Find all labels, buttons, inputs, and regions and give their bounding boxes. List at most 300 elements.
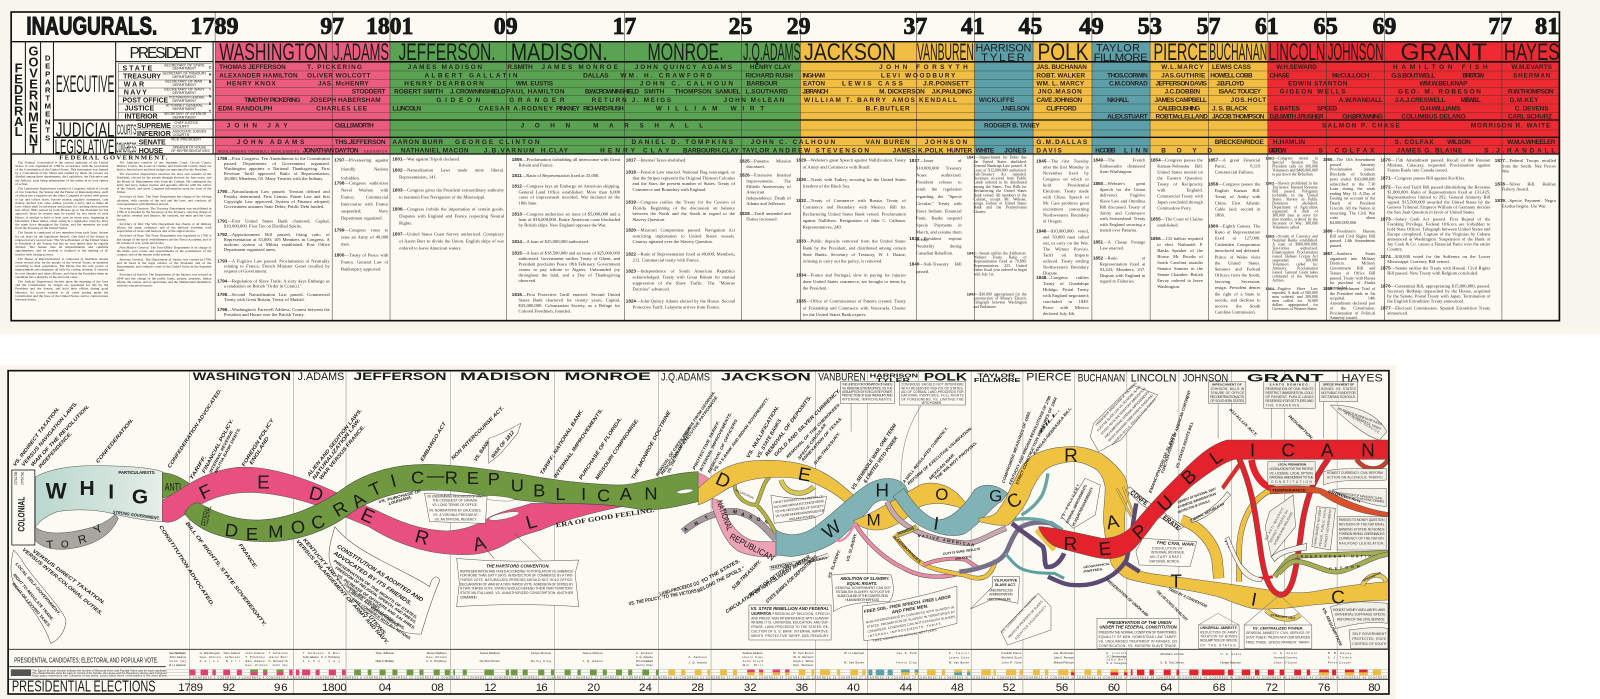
minor parties 1840s-1850s: NATIVE AMERICAN [917,533,975,548]
cabinet, court and congress names: S. COLFAX [1395,139,1434,146]
left labels: federal government structure: DEPARTMENT [173,75,196,79]
candidates per election: Geo. Clinton · Jefferson [200,655,241,659]
president names row: J.Q.ADAMS [743,39,801,66]
candidates per election: Jas. Buchanan [1054,651,1074,655]
chronology columns by presidency: 1875—Senate ratifies the Treaty with Hawaii. Civil Rights Bill passed. New Treaty with Belgium concluded. [1380,266,1490,276]
cabinet, court and congress names: ALEX.STUART [1107,113,1148,120]
cabinet, court and congress names: JAMES CAMPBELL [1155,97,1207,104]
chronology columns by presidency: 1813—Congress authorizes an issue of $5,000,000 and a loan of $16,000,000. Entire American coast blockaded by British ships. New England opposes the War. [512,211,620,227]
candidates per election: Geo. Washington [169,651,186,655]
bands: independent national and reform: REFORM [1329,564,1360,571]
left labels: federal government structure: DEPARTMENT [173,83,196,87]
issue labels above ribbons: KANSAS-NEBRASKA BILL. [1032,405,1073,456]
cabinet, court and congress names: LEWIS CASS [1212,64,1251,71]
president names row: J.ADAMS [333,39,389,66]
cabinet, court and congress names: HUNTER [947,147,973,154]
candidates per election: Hugh L. White [793,659,814,663]
president names row [219,39,1559,66]
notes: Republican era boxes: SPECIE PAYMENTS. TARIFF [1344,411,1382,431]
note: vs. undermining box: THE CONQUEST OF CANADA. [432,499,478,503]
notes: Whig, abolition, free soil and state rebellion boxes: INTERNAL IMPROVEMENTS. TARIFF. [868,622,942,638]
cabinet, court and congress names: ALBERT GALLATIN [425,72,518,79]
ribbon: Democratic-Republican: — [427,466,445,486]
small parties: Anti-Mason, National Republican, Nullification, Bolters [683,477,814,563]
scroll: constitution as adopted: PRESERVATION OF THE RIGHTS OF STATES. [333,558,419,620]
congress numbers row: 1 CONGRESS 2 CONGRESS 3 CONGRESS 4 CONGRESS 5 CONGRESS 6 CONGRESS 7 CONGRESS 8 CONGRESS 9 CONGRESS 10 CONGRESS 11 CONGRESS 12 CONGRESS 13 CONGRESS 14 CONGRESS 15 CONGRESS 16 CONGRESS 17 CONGRESS 18 CONGRESS 19 CONGRESS 20 CONGRESS 21 CONGRESS 22 CONGRESS 23 CONGRESS 24 CONGRESS 25 CONGRESS 26 CONGRESS 27 CONGRESS 28 CONGRESS 29 CONGRESS 30 CONGRESS 31 CONGRESS 32 CONGRESS 33 CONGRESS 34 CONGRESS 35 CONGRESS 36 CONGRESS 37 CONGRESS 38 CONGRESS 39 CONGRESS 40 CONGRESS 41 CONGRESS 42 CONGRESS 43 CONGRESS 44 CONGRESS 45 CONGRESS 46 CONGRESS [189,677,1387,679]
left labels: federal government structure: DEPARTMENT [173,67,196,71]
panel: inaugurals table [11,12,1559,321]
cabinet, court and congress names: COLUMBUS DELANO [1401,113,1466,120]
notes: Whig, abolition, free soil and state rebellion boxes: ASSUMPTION OF EXECUTIVE POWER. [842,390,893,394]
notes: Republican era boxes: VS. SQUATTER SOVEREIGNTY. [1071,486,1094,527]
notes: Republican era boxes: REVISION OF BUSINESS METHODS [1337,407,1383,426]
president names header: POLK [924,372,968,384]
ribbon: Federal: A [470,532,489,555]
chronology columns by presidency: 1832—Treaty of Commerce with Russia. Treaty of Commerce and Boundary with Mexico. Bill for Rechartering United States Bank vetoed. Proclamation against Nullifiers. Resignation of John C. Calhoun. Representatives, 240. [796,198,906,230]
cabinet, court and congress names: J. CROWNINSHIELD [450,89,506,96]
left labels: federal government structure: COURTS [173,133,190,137]
left labels: federal government structure: POSTMASTER GENERAL [169,96,205,100]
left labels: federal government structure: DEPARTMENT [173,107,196,111]
candidates per election: R. H. Harrison [169,663,186,667]
band: temperance and prohibition [1270,486,1389,517]
issue labels above ribbons: MISSOURI COMPROMISE. [594,418,641,481]
candidates per election: John Jay [169,659,187,663]
election years: 76 [1318,682,1330,694]
issue labels below ribbons [21,389,1344,647]
ribbon: Federal: E [257,471,270,492]
cabinet, court and congress names: JOHN MARSHALL [521,122,703,129]
ribbon: Democratic-Republican: D [224,520,239,541]
notes: Republican era boxes: LEGAL PROHIBITION. [1278,462,1307,466]
scroll: local self-government: LOCAL SELF-GOVERNMENT. [14,561,62,616]
box: colonial: COLONIAL [16,496,26,532]
notes: Whig, abolition, free soil and state rebellion boxes: VS.FUGITIVE [994,579,1018,583]
chronology columns by presidency: 1803—Congress gives the President extraordinary authority to maintain Free Navigation of the Mississippi. [392,187,504,199]
band: Confederate: ERATE [1161,514,1182,532]
notes: Republican era boxes: RESERVED FOR SETTLERS AND [1265,399,1314,403]
year scale: 09 [494,13,518,40]
issue labels above ribbons: SUB-TREASURY. [812,431,841,466]
issue labels above ribbons: VERSUS NAVIGATION LAWS. [21,401,79,468]
issue labels above ribbons: ANNEXATION OF TEXAS. [799,416,843,463]
year scale: 61 [1255,13,1279,40]
president names row: BUCHANAN [1209,39,1267,66]
ribbon: Whig second section [776,479,913,557]
notes: Whig, abolition, free soil and state rebellion boxes: CONGRESS SHOULD NOT INTERFERE [901,383,964,387]
federal government description: Secretary of Interior. The Department of the Interior was created in 1849 and has charge of the public lands, patents, pensions, Indian affairs, the census, and of agriculture and the Smithsonian Institution, with the education bureau. [117,273,211,288]
cabinet, court and congress names: WM.W.BELKNAP [1419,81,1468,88]
cabinet, court and congress names: ROBT.McLELLAND [1156,113,1208,120]
cabinet, court and congress names: W.M.A.WHEELER [1507,139,1556,146]
note: tilted Democratic protest box: ASSUMED POWERS. [789,514,816,521]
cabinet, court and congress names: JEFFERSON DAVIS [1156,81,1207,88]
ribbon: Whig (colonial): PARTICULARISTS. [118,470,156,475]
notes: Republican era boxes: CIVIL SERVICE [1352,416,1380,434]
year scale: 49 [1079,13,1104,40]
issue labels above ribbons: REMOVAL OF THE CHEROKEES [785,402,841,459]
notes: Republican era boxes: HONEST GOVERNMENT [1323,509,1332,547]
cabinet, court and congress names: EDM. RANDOLPH [218,105,273,112]
notes: Whig, abolition, free soil and state rebellion boxes: VS. CORRUPTION, FEDERAL [1000,594,1037,634]
bars: party control by congress [189,670,1381,675]
cabinet, court and congress names: L.SOUTHARD [746,89,788,96]
left labels: federal government structure: JUDICIAL [56,119,114,142]
ribbon: Democratic-Republican: R [329,497,351,521]
notes: Republican era boxes: DEMENT OF NATIONAL DEBT [1177,487,1217,504]
candidates per election: Henry Clay [636,663,653,667]
ribbon: Democratic first section: E [797,463,813,486]
year scale: 45 [1019,13,1042,40]
cabinet, court and congress names: ALEXANDER HAMILTON [219,72,298,79]
federal government description: Secretary of Navy. The Navy Department was organized in 1798. It has charge of the naval establishment and the Naval Academy, and of all vessels of war, yards and docks. [117,234,211,245]
chronology columns by presidency [217,155,1556,320]
president names header: MONROE [565,371,651,383]
chronology columns by presidency: 1826—Extensive Internal Improvements. The Fiftieth Anniversary of American Independence. Death of Adams and Jefferson. [739,173,791,206]
callout: the Hartford Convention: STATE MILITIA LAWS. VS. UNAUTHORIZED CONSCRIPTION. ANOTHER [460,591,574,595]
left labels: federal government structure: TREASURY [123,74,161,81]
cabinet, court and congress names: S. COLFAX [1319,147,1375,154]
candidates per election: Horatio Seymour [1220,660,1241,664]
year scale: 41 [961,13,985,40]
left labels: federal government structure: PRESIDENT [130,45,203,62]
cabinet, court and congress names: B.F.BUTLER [866,105,910,112]
legend explanation: Each space represents one Congress of two years; colors follow those of the parties in the chart above. [32,674,168,678]
issue labels below ribbons: TO THE STATES. [700,558,741,585]
ribbon: Democratic-Republican: A [348,488,370,512]
cabinet, court and congress names: JOHN JAY [227,122,288,129]
issue labels above ribbons: MILITIA BANK DEBTS. [213,427,242,474]
notes: Republican era boxes: PEACE. PUBLIC FAITH [1318,507,1328,547]
cabinet, court and congress names: DANIEL D. TOMPKINS [632,139,733,146]
issue labels above ribbons: THE WILMOT PROVISO. [933,440,978,481]
notes: Whig, abolition, free soil and state rebellion boxes: WITH RESERVED RIGHTS OF STATES. [901,386,964,390]
president names header: JEFFERSON [353,371,447,383]
issue labels below ribbons: FRANCE. [237,543,258,570]
president names header: BUCHANAN [1078,372,1125,384]
election years: 12 [484,682,497,694]
chronology columns by presidency: 1877—Electoral Commission. Spanish Extradition Treaty announced. [1380,306,1490,316]
scroll: constitution as adopted: FREEDOM OF RELIGION, SPEECH, AND PRESS. [334,565,418,625]
notes: Republican era boxes: CONSTITUTION [1271,480,1312,484]
chronology columns by presidency: 1877—Federal Troops recalled from the South. Nez Perces War. [1495,158,1556,174]
election years: 56 [1056,682,1068,694]
notes: Whig, abolition, free soil and state rebellion boxes: VS. STATE REBELLION AND FEDERAL [751,606,829,611]
election years: 96 [274,682,288,694]
notes: Republican era boxes: PRESERVATION OF THE UNION [1107,620,1172,625]
cabinet, court and congress names: JAS. McHENRY [318,81,369,88]
issue labels below ribbons: LAND-PROCEEDS GO [659,581,700,598]
year scale: 69 [1373,13,1396,40]
election years: 92 [223,682,235,694]
federal government description [15,154,211,319]
ribbon: Whig final section: I [932,513,940,534]
issue labels above ribbons: INTERNAL IMPROVEMENTS. [553,408,605,479]
chronology columns by presidency: 1873—Salary Grab Act passed. First Repeal of the Franking Privilege. Federal Officers are forbidden to hold State Offices. Telegraph between United States and Europe completed. Capture of the Virginius by Cubans announced at Washington. Suspension of the Bank of Jay Cook & Co. causes a Financial Panic over the entire Country. [1380,216,1490,251]
issue labels above ribbons: INDEPENDENCE. [38,431,74,470]
cabinet, court and congress names: WILLIAM T. BARRY [804,97,887,104]
left labels: federal government structure: DEPARTMENTS [44,54,51,143]
left labels: federal government structure: STATE [122,66,153,73]
minor parties 1840s-1850s: HUNKERS [897,526,915,536]
notes: Republican era boxes: FOREIGN PAYING. GREENBACKS [1339,532,1385,536]
notes: Republican era boxes: RECONSTRUCTION ACTS [1210,395,1244,399]
chronology columns by presidency: 1792—Apportionment Bill passed, fixing ratio of Representation at 33,000; 105 Members in Congress. A uniform system of Militia established. Post Office Department organized anew. [217,232,330,252]
cabinet, court and congress names: H.HAMLIN [1273,139,1305,146]
federal government description: Attorney General. The Department of Justice was created in 1789, and its head is the legal adviser of the President and of the Departments, and conducts cases of the United States in the Supreme Court. [117,258,211,272]
cabinet, court and congress names: SPEED [1317,105,1338,112]
cabinet, court and congress names: M.JEWELL [1461,97,1481,104]
left labels: federal government structure: INTERIOR [124,114,158,121]
president names row: TAYLOR [1096,43,1140,55]
issue labels above ribbons: WAR OF THE REVOLUTION. [30,404,91,468]
cabinet, court and congress names: HENRY DEARBORN [404,81,484,88]
cabinet, court and congress names: DALLAS [583,72,609,79]
ribbon: Democratic-Republican: C [411,467,424,487]
candidates per election: Thos. Jefferson [375,651,394,655]
cabinet, court and congress names: RODGER B. TANEY [984,122,1041,129]
notes: Republican era boxes: PROHIBITION OF MANUFACTURE [1335,491,1383,501]
federal government description: Post-Master General. The Post-Office Department is in charge of the mails, post routes and appointments of the postmasters of the country, and of the money order system. [117,246,211,257]
election years: 36 [796,682,808,694]
cabinet, court and congress names: T. PICKERING [307,64,362,71]
cabinet, court and congress names: CLIFFORD [1046,105,1077,112]
ribbon: Federal: F [196,480,215,503]
issue labels above ribbons: GOLD AND SILVER CURRENCY. [773,388,842,458]
ribbon: Democratic-Republican: FEDERAL [198,505,213,527]
president names row: WASHINGTON [219,39,328,66]
ribbon: Republican: U [1153,491,1177,515]
chronology columns by presidency: 1871—Congress passes Bill against Ku-Klux. [1380,176,1466,181]
ribbon: Republican [1038,440,1389,595]
cabinet, court and congress names: TIMOTHY PICKERING [244,97,300,104]
ribbon: Democratic-Republican [184,464,698,544]
chronology columns by presidency: 1879—Specie Payment. Negro Exodus begins. Ute War. [1495,198,1556,208]
issue labels above ribbons: VS. PURCHASE OF [378,488,422,504]
chronology columns by presidency: 1819—Congress ratifies the Treaty for the Cession of Florida. Beginning of the discussion on balance between the North and the South in regard to the Slavery Question. [626,199,735,222]
cabinet, court and congress names: HOWELL COBB [1210,72,1253,79]
callout: the Hartford Convention: REPRESENTATION AND TAXES ACCORDING TO POPULATION VS. EMBARGO [460,569,574,573]
notes: Republican era boxes: OBSTRUCTION OF SCHOOLS [1177,499,1211,514]
cabinet, court and congress names: WILSON [1447,139,1471,146]
table outer frame [11,12,1559,321]
ribbon: Tory: R [77,533,88,547]
issue labels above ribbons: VS. THE PANAMA MISSION. [666,425,692,474]
notes: Whig, abolition, free soil and state rebellion boxes: ARE GOD'S. [954,555,972,561]
cabinet, court and congress names: H.COBB [1095,147,1116,154]
issue labels below ribbons: SUB-TREASURY. [731,559,763,591]
candidates per election: J. Q. Adams [688,660,708,664]
notes: Whig, abolition, free soil and state rebellion boxes: FREEDOM OF RELIGION, SPEECH [773,612,830,616]
president names row: LINCOLN [1268,39,1325,66]
issue labels above ribbons: PROTECTIVE TARIFF. [691,420,721,470]
candidates per election: J. C. Breckenridge [1106,654,1127,658]
president names row: FILLMORE [1094,52,1148,64]
issue labels above ribbons: VS. SEMINOLE WAR, ONE TERM [850,422,899,491]
ribbon: Democratic arch to right edge: C [1003,488,1025,513]
cabinet, court and congress names: B.W.CROWNINSHIELD [585,89,639,96]
candidates per election [169,651,1352,667]
cabinet, court and congress names: SEDGWICK [364,149,388,153]
cabinet, court and congress names: LINN [1124,147,1148,154]
cabinet, court and congress names: J.R.POINSETT [923,81,969,88]
cabinet, court and congress names: H.CLAY [541,147,569,154]
notes: Whig, abolition, free soil and state rebellion boxes: WHERE IT IS. UNIVERSAL EDUCATION. AND SUF- [751,621,829,625]
cabinet, court and congress names: THOMPSON [675,89,712,96]
notes: Whig, abolition, free soil and state rebellion boxes: SLAVE CLAUSE OF THE CONSTITUTION [837,594,889,598]
notes: Republican era boxes: NO PUBLIC FUNDS FOR [1321,391,1356,395]
chronology columns by presidency: 1837—Issue of $10,000,000 Treasury Notes authorized. President refuses to remit the regulation regarding the "Specie Circular." Treaty with Sioux Indians. Financial Panic. Banks suspend Specie Payments in March, and resume them in July. [909,158,962,242]
scroll: local self-government [11,550,66,643]
cabinet, court and congress names: RICHARD RUSH [746,72,793,79]
candidates per election: Lewis Cass [949,656,970,660]
left labels: federal government structure: HOUSE [139,148,163,155]
candidates per election: R. B. Hayes [1328,651,1352,655]
cabinet, court and congress names: JOHN C. CALHOUN [751,139,836,146]
chronology columns by presidency: 1789—First Congress. Ten Amendments to the Constitution passed. Departments of Government organized. Washington appoints a National Thanksgiving. First Revenue Tariff approved. Ratio of Representation, 30,000; Members, 65. Many Treaties with the Indians. [217,156,330,181]
candidates per election: Horace Greeley [1274,656,1298,660]
chronology columns by presidency: 1815—A loan of $18,500,000 and an issue of $25,000,000 authorized. Government ratifies Treaty of Ghent, and President proclaims Peace 18th February. Government ceases to pay tribute to Algiers. Unbounded joy throughout the land, and a Day of Thanksgiving observed. [512,250,620,283]
cabinet, court and congress names: JOHN QUINCY ADAMS [635,64,732,71]
chronology columns by presidency: 1841—Impeachment for Debts due the United States abolished. General Bankrupt Law passed. A Loan of $12,000,000 authorized. Sub-Treasury Act repealed. Revenues received from Public Lands ordered to be distributed among the States. Two Bills for Rechartering the United States Bank vetoed. All members of the Cabinet, except Mr. Webster, resign. Failure of United States Bank and the Pennsylvania Charter. [967,156,1027,214]
president names header: J.ADAMS [298,371,344,383]
candidates per election: C. C. Pinckney [426,659,447,663]
cabinet, court and congress names: R.SMITH [507,64,533,71]
election years: 20 [587,682,600,694]
issue labels above ribbons: FINANCIAL POLICY. [201,418,235,474]
cabinet, court and congress names: J.K.PAULDING [932,89,972,96]
cabinet, court and congress names: GIDEON WELLS [1280,89,1346,96]
left labels: federal government structure: INFERIOR [137,131,171,138]
chronology columns by presidency: 1845—The first Tuesday after the first Monday in November fixed by Congress on which to hold Presidential Elections. Treaty made with China. Speech of Mr. Cass produces great excitement concerning Northwestern Boundary of Oregon. [1036,158,1089,223]
cabinet, court and congress names: G.A.GROW [1268,147,1287,154]
notes: Whig, abolition, free soil and state rebellion boxes: INTERNAL IMPROVEMENTS. [842,397,893,401]
cabinet, court and congress names: THOMAS JEFFERSON [219,64,286,71]
legend explanation: The figures at each election indicate the number of Electoral Votes and Popular Votes cast for each candidate. [32,668,168,672]
panel: presidential elections strip [8,649,1389,696]
scroll: constitution as adopted: LIBERAL NATURALIZATION LAWS. [348,588,406,631]
candidates per election: J. Q. Adams [636,655,653,659]
election years: 1800 [322,682,347,694]
candidates per election: Sam. Adams · O. Ellsworth [245,659,288,663]
left labels: federal government structure: COURTS [117,123,136,139]
ribbon: Whig final section: G [989,487,1002,506]
chronology columns by presidency: 1812—Congress lays an Embargo on American shipping. General Land Office established. More than 6,000 cases of impressment recorded. War declared on the 18th June. [512,184,620,205]
year scale: 1789 [190,13,238,40]
year scale: 57 [1197,13,1220,40]
issue labels below ribbons: VS. RESUMPTION [1321,607,1344,647]
issue labels below ribbons: EMANCIPATION OF SLAVES. [1147,432,1177,494]
president names row: TYLER [981,52,1025,64]
cabinet, court and congress names: RETURN J. MEIGS [592,97,671,104]
notes: Republican era boxes: FREEDOM THE NORMAL CONDITION OF TERRITORIES. [1099,630,1177,634]
left labels: federal government structure: EXECUTIVE [56,71,114,98]
president names header: LINCOLN [1131,372,1176,384]
notes: Republican era boxes: REVISION OF THE NATIONAL [1339,523,1385,527]
president names header [193,371,1383,384]
cabinet, court and congress names: MUHLENBERG TRUMBULL MUHLENBERG [218,149,300,153]
cabinet, court and congress names: L.LINCOLN [392,105,422,112]
notes: Republican era boxes: TENURE OF OFFICE [1210,391,1244,395]
notes: Republican era boxes: WOMEN AND RELIGION [1273,511,1294,546]
notes: Republican era boxes: PROTECTED. STATE [1352,637,1386,641]
chronology columns by presidency: 1801—War against Tripoli declared. [392,157,460,162]
candidates per election: Wm. Wirt [742,663,763,667]
notes: Republican era boxes: OF PAYMENT. PUBLIC LANDS [1265,395,1313,399]
callout: the Hartford Convention: FOR MORE THAN SIXTY DAYS. INTERDICTION OF COMMERCE BY A TWO- [460,574,573,578]
candidates per election: A. Jackson [636,651,653,655]
note: vs. undermining box: VS. NOMINATIONS BY CAUCUSES. [429,509,481,513]
notes: Whig, abolition, free soil and state rebellion boxes: FRAGE. LAND-PROCEEDS TO THE STATES. RE- [751,625,829,629]
cabinet, court and congress names: J.A.J.CRESWELL [1395,97,1446,104]
candidates per election: M. Van Buren [949,660,970,664]
callout: the Hartford Convention: THE HARTFORD CONVENTION. [486,563,550,568]
cabinet, court and congress names: BRECKENRIDGE [1215,139,1264,146]
chronology columns by presidency: 1854—Congress passes the Kansas-Nebraska Bill. United States neutral on the Eastern Question. Treaty of Reciprocity with England. Commercial Treaty with Japan concluded through Commodore Perry. [1150,157,1203,210]
left labels: federal government structure: JUSTICE [124,106,155,113]
issue labels above ribbons: WAR VERSUS FRANCE. [318,424,367,481]
note: tilted Democratic protest box: VS. THOSE WHOSE MONOPOLIES FOR [775,508,826,518]
chronology columns by presidency: 1835—Office of Commissioner of Patents created. Treaty of Friendship and Commerce with Venezuela. Charter for the United States Bank expires. [796,299,906,317]
ribbon: Democratic-Republican: N [644,483,658,503]
election years: 16 [536,682,548,694]
chronology columns by presidency: 1794—Regulation of Slave Trade. A sixty days Embargo as a retaliation on British "Order in Council." [217,279,330,289]
year scale: 77 [1488,13,1512,40]
ribbon: Federal: D [307,482,326,506]
ribbon: Whig (colonial): W [46,478,67,503]
notes: Whig, abolition, free soil and state rebellion boxes: DUCTION OF U. S. BANK. INTERNAL IMPROVE- [751,629,829,633]
issue labels above ribbons: PURCHASE OF FLORIDA. [578,416,624,481]
candidates per election: W. H. Harrison [793,655,814,659]
election years: 24 [639,682,653,694]
notes: Republican era boxes: OF SOUTHERN STATES [1210,399,1244,403]
federal government description: Secretary of State. The State Department has charge of the foreign relations, with custody of the seal and the laws, and conducts all correspondence with ministers abroad. [117,195,211,206]
notes: Republican era boxes: FUGITIVE SLAVE LAW VS. NO MORE SLAVE [1096,385,1142,432]
notes: Republican era boxes [1059,379,1388,648]
cabinet, court and congress names: JNO.MASON [1038,89,1082,96]
cabinet, court and congress names: AMOS KENDALL [892,97,957,104]
candidates per election: Franklin Pierce [1001,651,1022,655]
cabinet, court and congress names: W.H.SEWARD [1276,64,1317,71]
federal government description: Secretary of War. The War Department has charge of all military affairs, the army, ordnance, and of the military academy, with supervision of rivers and harbors and of the signal service. [117,222,211,233]
cabinet, court and congress names: W.L.MARCY [1161,64,1204,71]
notes: Whig, abolition, free soil and state rebellion boxes: SLAVE ACT. [995,583,1016,587]
cabinet, court and congress names: WM. L. MARCY [1036,81,1085,88]
election years: 60 [1108,682,1120,694]
ribbon: Tory: Y [92,523,106,537]
cabinet, court and congress names: ANDREW STEVENSON [773,147,869,154]
candidates per election: Winfield Scott [1001,656,1022,660]
ribbon: Federal: E [358,503,378,528]
chronology columns by presidency: 1856—133 ballots required to elect Nathaniel P. Banks Speaker of the House. Mr. Brooks of South Carolina assaults Senator Sumner in the Senate Chamber. British Envoy ordered to leave Washington. [1150,236,1203,289]
cabinet, court and congress names: SALMON P. CHASE [1322,122,1400,129]
legend explanation: The shaded blocks show the party in control of the Senate, the House and the Presidency during each Congress. [32,671,168,675]
issue labels below ribbons: BILL. [1038,407,1061,434]
cabinet, court and congress names: JAMES MONROE [542,64,618,71]
issue labels above ribbons: CONFEDERATION. [95,418,135,465]
cabinet, court and congress names: CAVE JOHNSON [1036,97,1083,104]
candidates per election: John P. Hale [1001,660,1022,664]
notes: Republican era boxes: INTERNAL REVENUE. [1151,551,1185,555]
president names header: J.Q.ADAMS [661,372,710,384]
issue labels below ribbons: STATE BANKS FOR DEPOSITORIES. [765,554,820,605]
candidates per election: Z. Taylor [949,651,969,655]
cabinet, court and congress names: WHITE [976,147,994,154]
notes: Republican era boxes: UNIVERSAL SUFFRAGE SPECIE [1335,613,1386,617]
notes: Republican era boxes: GENERAL AMNESTY. CIVIL SERVICE OF [1246,631,1310,635]
notes: Whig, abolition, free soil and state rebellion boxes: ADMINISTRATION [989,593,1013,597]
issue labels below ribbons: VS. THE POLICY, "TO THE VICTORS [628,588,698,607]
